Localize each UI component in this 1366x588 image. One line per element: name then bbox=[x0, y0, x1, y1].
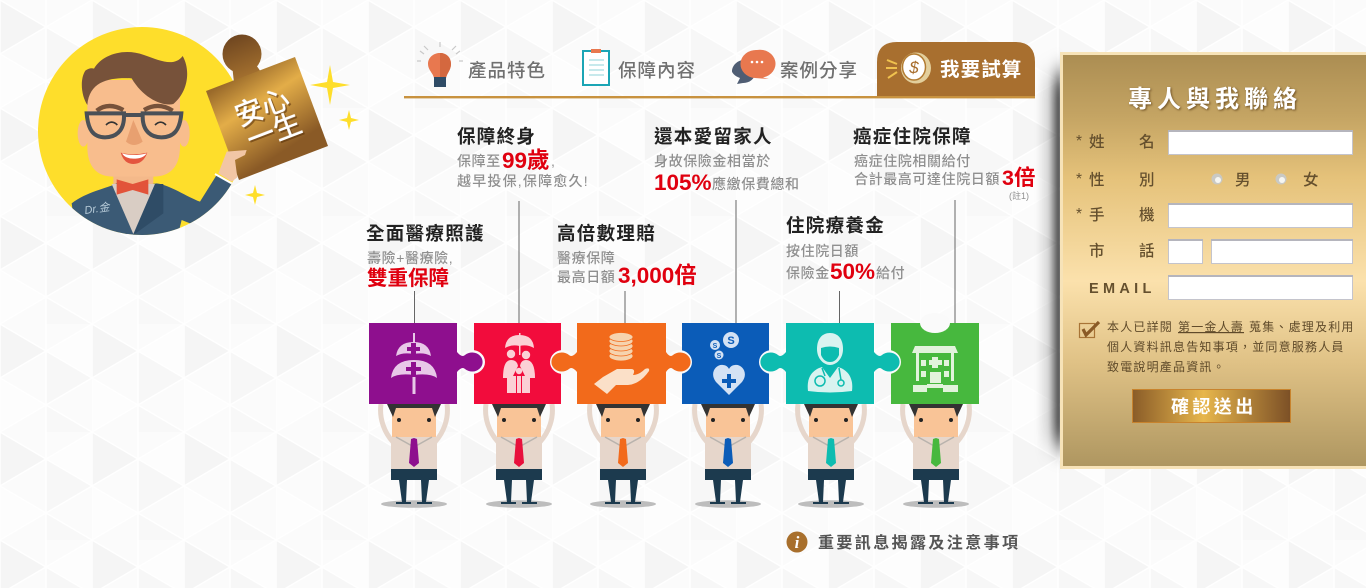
mascot hand bbox=[215, 150, 247, 183]
piece: green hospital bbox=[875, 313, 979, 404]
navigation tabs bbox=[404, 42, 1035, 98]
gender radios: 男 bbox=[1235, 172, 1251, 189]
feature: 高倍數理賠: 醫療保障 bbox=[557, 250, 615, 266]
field labels bbox=[1076, 133, 1156, 297]
icon: coin bbox=[886, 52, 931, 84]
mascot: Dr. Jin holding puzzle piece bbox=[38, 27, 359, 240]
consent text: 致電說明產品資訊。 bbox=[1107, 359, 1226, 374]
feature: 癌症住院保障: 合計最高可達住院日額 bbox=[854, 171, 1000, 187]
consent checkbox bbox=[1080, 322, 1099, 338]
feature: 保障終身: 越早投保,保障愈久! bbox=[457, 173, 589, 189]
icon: clipboard bbox=[583, 49, 609, 85]
piece: blue heart bbox=[666, 323, 785, 404]
feature: 住院療養金: 保險金 bbox=[786, 265, 830, 281]
tab: 產品特色: 產品特色 bbox=[468, 60, 546, 81]
feature: 保障終身: 保障終身 bbox=[457, 126, 536, 147]
piece: blue heart: S bbox=[717, 353, 722, 360]
feature: 還本愛留家人: 身故保險金相當於 bbox=[654, 153, 771, 169]
figures holding puzzle bbox=[381, 404, 969, 508]
feature: 還本愛留家人: 應繳保費總和 bbox=[712, 176, 800, 192]
piece: orange coins bbox=[551, 323, 691, 404]
feature: 高倍數理賠: 高倍數理賠 bbox=[557, 223, 656, 244]
piece: blue heart: S bbox=[727, 335, 735, 347]
feature: 保障終身 bbox=[457, 126, 589, 189]
puzzle piece badge bbox=[206, 34, 328, 180]
gender radios: 女 bbox=[1303, 170, 1319, 189]
puzzle piece badge: 安心 bbox=[230, 83, 294, 132]
sparkles bbox=[245, 65, 359, 205]
feature: 全面醫療照護: 雙重保障 bbox=[367, 267, 449, 290]
connector lines bbox=[414, 200, 955, 326]
feature: 保障終身: , bbox=[551, 153, 556, 169]
feature: 保障終身: 99歲 bbox=[502, 148, 550, 173]
field labels: 別 bbox=[1139, 171, 1155, 189]
feature: 癌症住院保障 bbox=[853, 126, 1035, 201]
field labels: 機 bbox=[1139, 206, 1155, 224]
consent text bbox=[1107, 319, 1355, 374]
figure 4 bbox=[695, 404, 761, 508]
field labels: 性 bbox=[1089, 171, 1105, 189]
icon: info bbox=[786, 532, 808, 552]
field labels: 市 bbox=[1089, 241, 1105, 260]
piece: blue heart: S bbox=[713, 343, 718, 350]
feature: 癌症住院保障: (註1) bbox=[1009, 190, 1029, 201]
icon: light bulb bbox=[417, 42, 463, 87]
feature: 癌症住院保障: 3倍 bbox=[1002, 165, 1035, 190]
feature: 全面醫療照護 bbox=[366, 223, 485, 290]
feature: 高倍數理賠: 最高日額 bbox=[557, 269, 615, 285]
piece: red family bbox=[459, 323, 576, 404]
figure 1 bbox=[381, 404, 447, 508]
feature: 住院療養金: 給付 bbox=[876, 265, 905, 281]
figure 2 bbox=[486, 404, 552, 508]
gender radios bbox=[1212, 170, 1319, 189]
field labels: EMAIL bbox=[1089, 281, 1156, 297]
submit button bbox=[1132, 390, 1290, 422]
character: Dr.金 bbox=[84, 200, 112, 217]
icon: info: i bbox=[795, 533, 800, 552]
piece: teal doctor bbox=[760, 323, 900, 404]
feature: 還本愛留家人: 105% bbox=[654, 170, 712, 195]
character bbox=[72, 52, 232, 240]
field labels: 話 bbox=[1139, 242, 1155, 260]
feature: 保障終身: 保障至 bbox=[457, 153, 501, 169]
field labels: * bbox=[1076, 206, 1082, 223]
feature: 高倍數理賠: 3,000倍 bbox=[618, 262, 697, 288]
figure 5 bbox=[798, 404, 864, 508]
piece: purple umbrellas bbox=[369, 323, 483, 404]
active tab background bbox=[877, 42, 1035, 97]
consent text: 第一金人壽 bbox=[1178, 319, 1244, 334]
feature: 住院療養金 bbox=[786, 215, 905, 284]
figure 6 bbox=[903, 404, 969, 508]
icon: chat bubbles bbox=[732, 50, 776, 84]
icon: coin: $ bbox=[908, 58, 919, 77]
feature: 全面醫療照護: 壽險+醫療險, bbox=[367, 250, 453, 266]
input fields bbox=[1168, 130, 1353, 300]
feature: 高倍數理賠 bbox=[557, 223, 697, 288]
tab: 保障內容: 保障內容 bbox=[618, 60, 696, 81]
consent text: 蒐集、處理及利用 bbox=[1249, 319, 1355, 334]
puzzle piece badge: 一生 bbox=[242, 107, 306, 156]
yellow circle bbox=[38, 27, 246, 235]
tab: 案例分享: 案例分享 bbox=[780, 60, 858, 81]
figure 3 bbox=[590, 404, 656, 508]
field labels: * bbox=[1076, 171, 1082, 188]
feature: 還本愛留家人: 還本愛留家人 bbox=[654, 126, 773, 147]
feature: 全面醫療照護: 全面醫療照護 bbox=[366, 223, 485, 244]
feature: 還本愛留家人 bbox=[654, 126, 800, 195]
submit button: 確認送出 bbox=[1171, 397, 1257, 417]
feature: 住院療養金: 住院療養金 bbox=[786, 215, 885, 236]
field labels: * bbox=[1076, 133, 1082, 150]
feature: 癌症住院保障: 癌症住院保障 bbox=[853, 126, 972, 147]
form title: 專人與我聯絡 bbox=[1128, 86, 1302, 113]
field labels: 名 bbox=[1139, 133, 1155, 151]
panel: contact form bbox=[1036, 54, 1366, 468]
disclosure link: 重要訊息揭露及注意事項 bbox=[818, 533, 1020, 552]
field labels: 手 bbox=[1089, 206, 1105, 224]
tab underline bbox=[404, 96, 1035, 98]
puzzle pieces bbox=[369, 313, 979, 404]
consent text: 個人資料訊息告知事項，並同意服務人員 bbox=[1107, 339, 1345, 354]
feature: 癌症住院保障: 癌症住院相關給付 bbox=[854, 153, 971, 169]
feature: 住院療養金: 按住院日額 bbox=[786, 243, 859, 259]
field labels: 姓 bbox=[1089, 133, 1105, 151]
consent text: 本人已詳閱 bbox=[1107, 319, 1173, 334]
tab: 我要試算: 我要試算 bbox=[940, 58, 1022, 81]
feature: 住院療養金: 50% bbox=[830, 259, 875, 284]
